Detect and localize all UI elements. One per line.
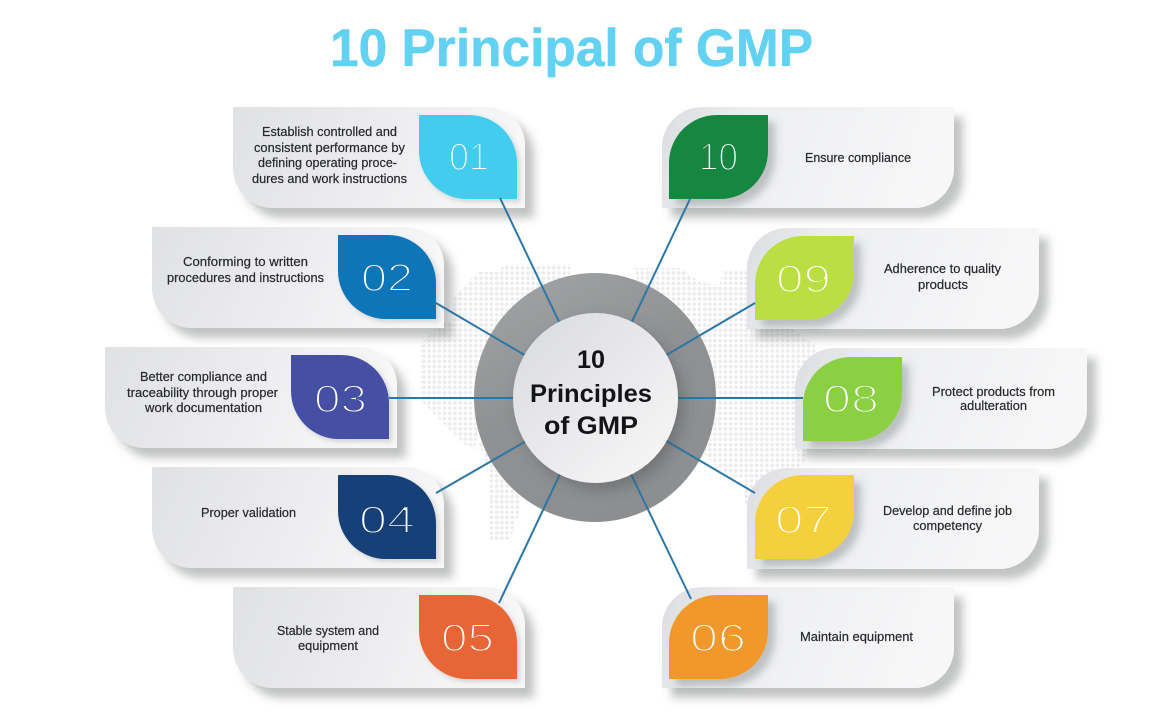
panel: 05 (233, 587, 525, 688)
panel: 02 (152, 227, 444, 328)
panel: 03: 03 (314, 378, 367, 421)
panel: 03: work documentation (144, 400, 262, 415)
panel: 05: Stable system and (277, 623, 379, 638)
panel: 07: 07 (775, 499, 832, 542)
centre heading: Principles (530, 380, 652, 408)
panel: 04: 04 (359, 499, 415, 542)
panel: 08: 08 (823, 378, 879, 421)
centre heading: of GMP (544, 412, 638, 440)
panel: 05: equipment (298, 638, 358, 653)
panel: 10: Ensure compliance (805, 150, 911, 165)
panel: 01 (233, 107, 525, 208)
panel: 01: consistent performance by (254, 140, 405, 155)
connector lines (389, 198, 803, 603)
outer grey ring (474, 273, 716, 522)
panel: 03 (105, 347, 397, 448)
panel: 09: products (918, 277, 968, 292)
panel: 08: adulteration (960, 398, 1027, 413)
panel: 08: Protect products from (932, 384, 1055, 399)
panel: 03: traceability through proper (127, 385, 279, 400)
panel: 06 (662, 587, 954, 688)
panel: 10 (662, 107, 954, 208)
panel: 01: Establish controlled and (262, 124, 397, 139)
centre heading (530, 346, 652, 440)
panel: 01: 01 (449, 136, 489, 179)
panel: 05: 05 (441, 617, 494, 660)
panel: 01: dures and work instructions (252, 171, 407, 186)
panel: 02: 02 (361, 257, 413, 300)
centre heading: 10 (577, 346, 605, 374)
panel: 09: Adherence to quality (884, 261, 1001, 276)
panel: 08 (795, 348, 1087, 449)
panel: 06: Maintain equipment (800, 629, 913, 644)
title: 10 Principal of GMP (330, 19, 813, 78)
panel: 04: Proper validation (201, 505, 296, 520)
panel: 07: Develop and define job (883, 503, 1012, 518)
dotted world map background (420, 264, 816, 540)
panel: 02: Conforming to written (183, 254, 308, 269)
panel: 09 (747, 228, 1039, 329)
panel: 07 (747, 468, 1039, 569)
panel: 01: defining operating proce- (258, 155, 397, 170)
panel: 06: 06 (690, 617, 746, 660)
panel: 10: 10 (699, 136, 738, 179)
panel: 03: Better compliance and (140, 369, 267, 384)
centre disc (513, 313, 678, 483)
panel: 04 (152, 467, 444, 568)
panel: 09: 09 (776, 258, 831, 301)
panel: 02: procedures and instructions (167, 270, 324, 285)
panel: 07: competency (913, 518, 982, 533)
